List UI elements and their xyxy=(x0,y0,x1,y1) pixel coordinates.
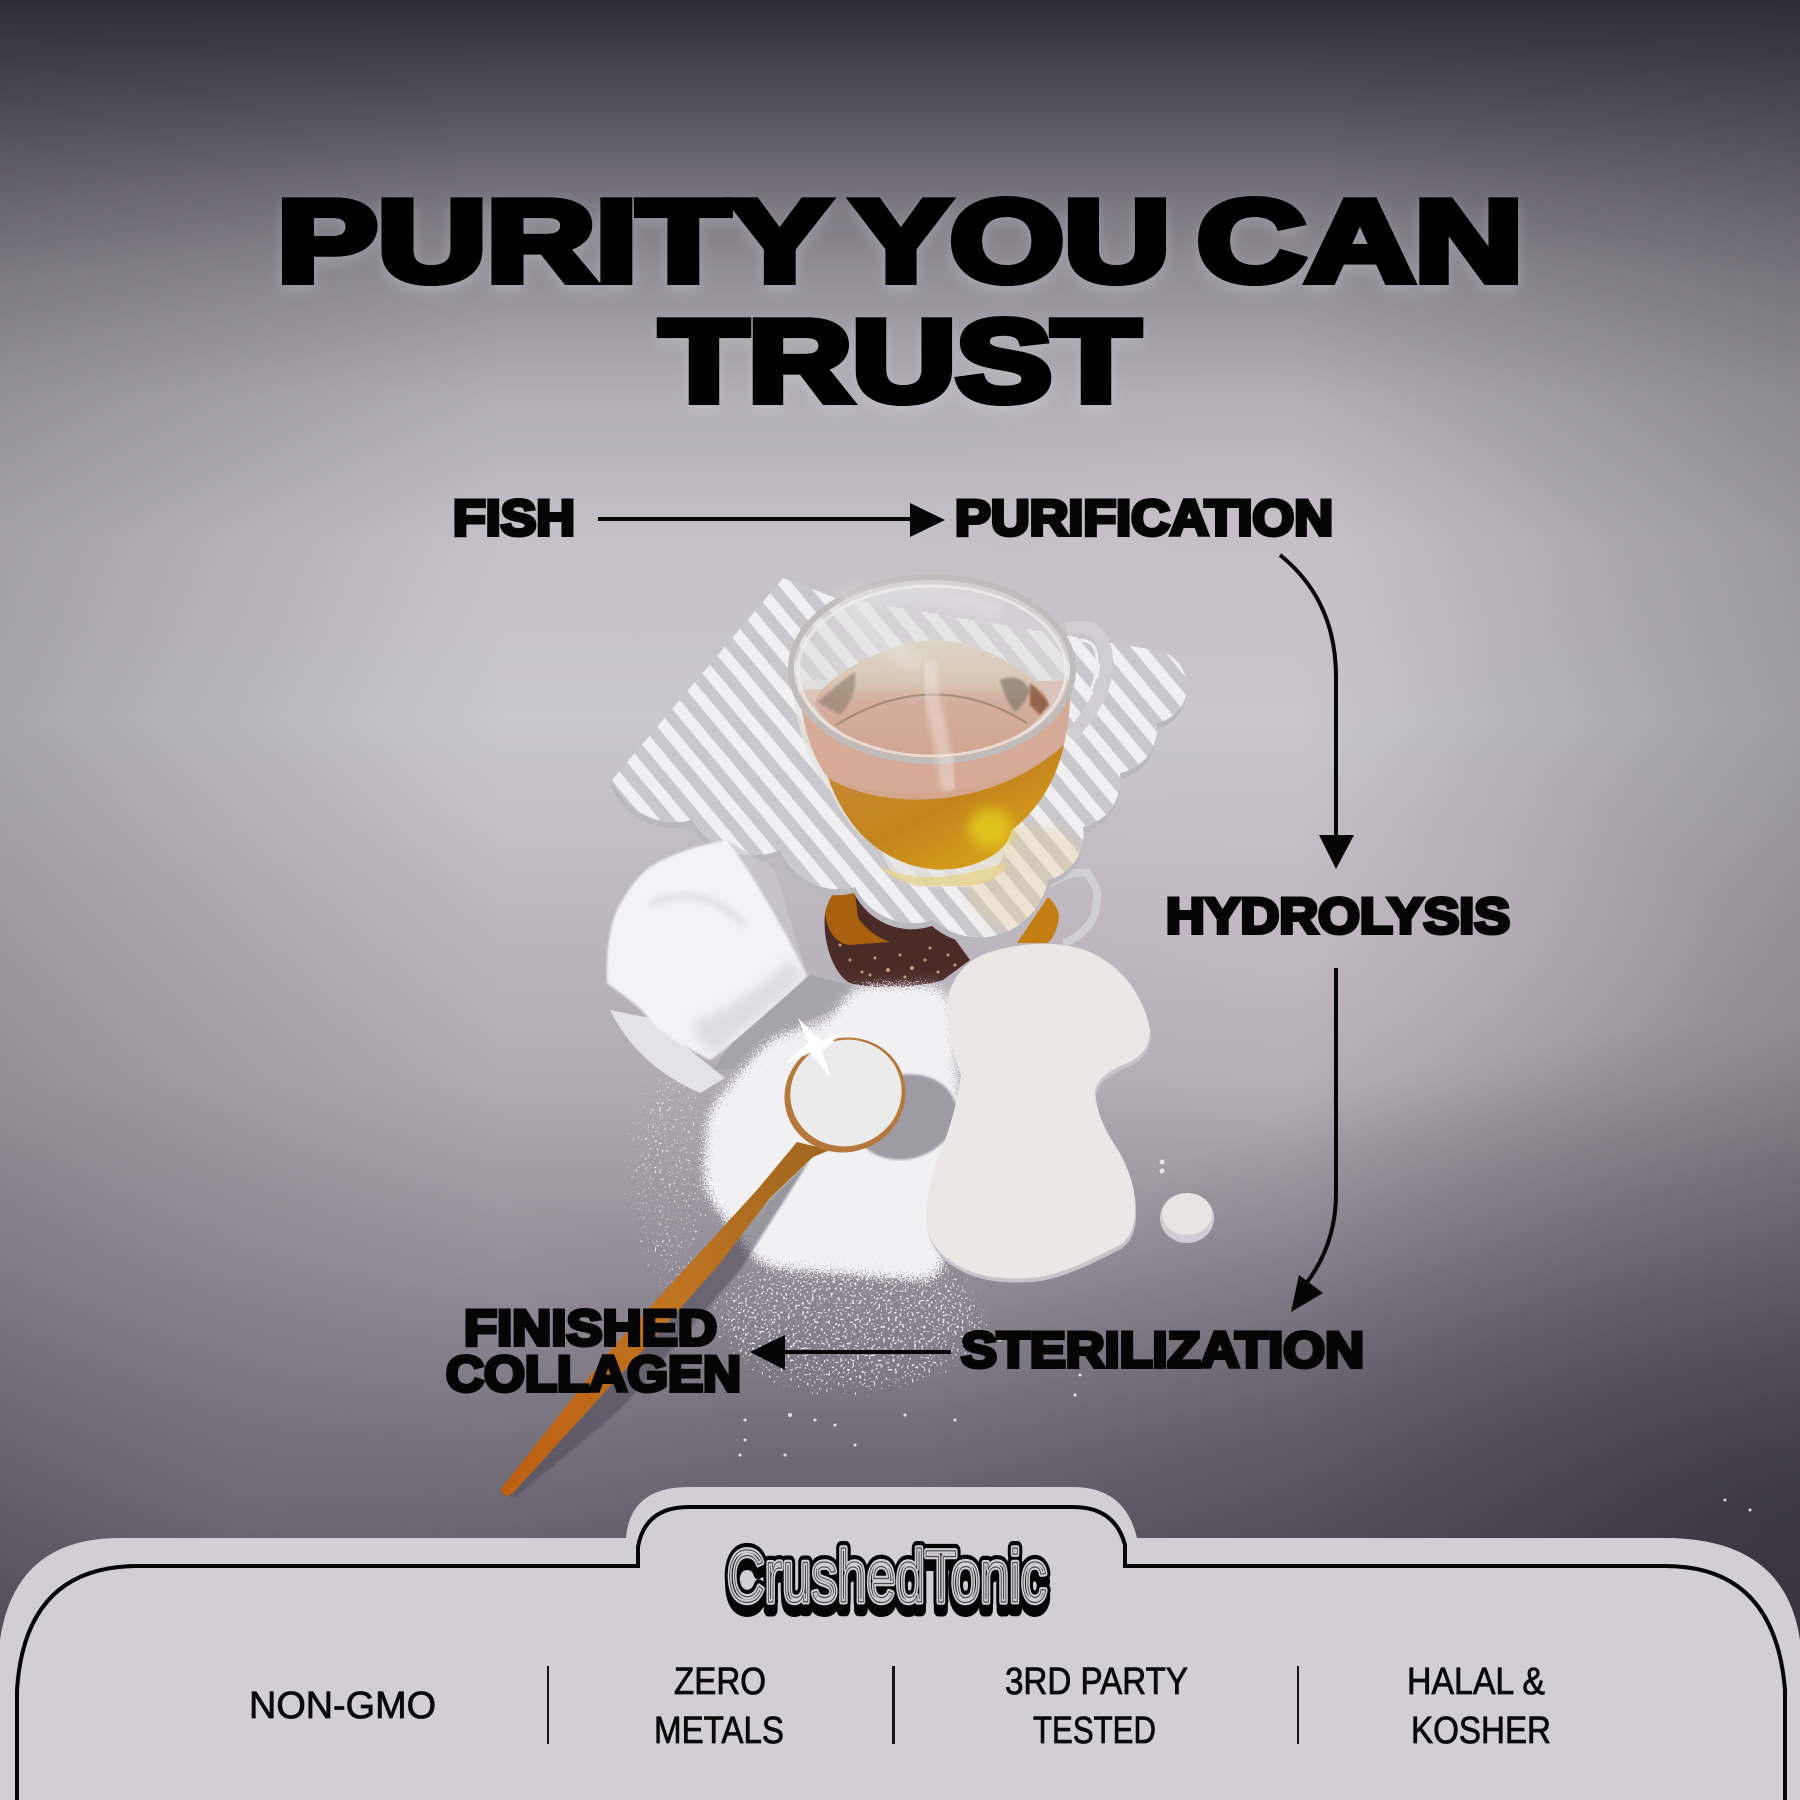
label: halal and kosher xyxy=(1407,1661,1551,1752)
logo xyxy=(727,1535,1047,1626)
logo: CrushedTonic xyxy=(727,1535,1047,1618)
striped scalloped card xyxy=(611,578,1186,940)
title: YOU xyxy=(852,176,1170,306)
label: halal and kosher: KOSHER xyxy=(1411,1710,1551,1752)
sparkle xyxy=(785,1018,843,1077)
label: finished collagen: FINISHED xyxy=(464,1300,717,1356)
label: 3rd party tested: 3RD PARTY xyxy=(1005,1661,1188,1703)
flow arrow: hydrolysis to sterilization xyxy=(1291,968,1336,1312)
flow arrow: purification to hydrolysis xyxy=(1280,555,1354,869)
divider 3 xyxy=(1297,1666,1299,1744)
label: zero metals: METALS xyxy=(654,1710,784,1752)
panel background xyxy=(0,1487,1800,1800)
label: 3rd party tested: TESTED xyxy=(1033,1710,1156,1752)
label: hydrolysis: HYDROLYSIS xyxy=(1166,888,1510,944)
product photo: tea cup, collagen powder and spoon xyxy=(500,560,1752,1512)
label: finished collagen xyxy=(446,1300,741,1402)
powder pile xyxy=(615,983,1000,1405)
gold spoon xyxy=(500,1021,922,1497)
label: zero metals: ZERO xyxy=(674,1661,766,1703)
logo: CrushedTonic xyxy=(727,1535,1047,1618)
flow arrow: fish to purification xyxy=(598,503,945,537)
label: purification: PURIFICATION xyxy=(955,490,1333,546)
label: halal and kosher: HALAL & xyxy=(1407,1661,1545,1703)
logo: CrushedTonic xyxy=(727,1543,1047,1626)
label: 3rd party tested xyxy=(1005,1661,1188,1752)
title: TRUST xyxy=(660,296,1140,426)
title: PURITY xyxy=(277,176,830,306)
glass tea cup xyxy=(789,575,1107,887)
milk drops xyxy=(1160,1160,1214,1243)
flow arrow: sterilization to finished collagen xyxy=(750,1335,951,1370)
milk puddle xyxy=(926,944,1151,1282)
cup reflection under the card xyxy=(825,872,1098,987)
label: zero metals xyxy=(654,1661,784,1752)
title xyxy=(277,176,1523,426)
cream blob xyxy=(607,840,807,1093)
shadow of cream blob on surface xyxy=(713,975,853,1070)
label: fish: FISH xyxy=(453,490,575,546)
divider 2 xyxy=(892,1666,895,1744)
divider 1 xyxy=(547,1666,549,1744)
panel outline xyxy=(17,1507,1785,1800)
logo: CrushedTonic xyxy=(727,1535,1047,1618)
scattered powder grains xyxy=(738,1338,1752,1512)
label: non-gmo: NON-GMO xyxy=(249,1685,436,1727)
label: finished collagen: COLLAGEN xyxy=(446,1346,741,1402)
spoon shadow xyxy=(508,1160,810,1497)
title: CAN xyxy=(1197,176,1523,306)
panel: certifications footer xyxy=(0,1487,1800,1800)
label: sterilization: STERILIZATION xyxy=(961,1322,1364,1378)
